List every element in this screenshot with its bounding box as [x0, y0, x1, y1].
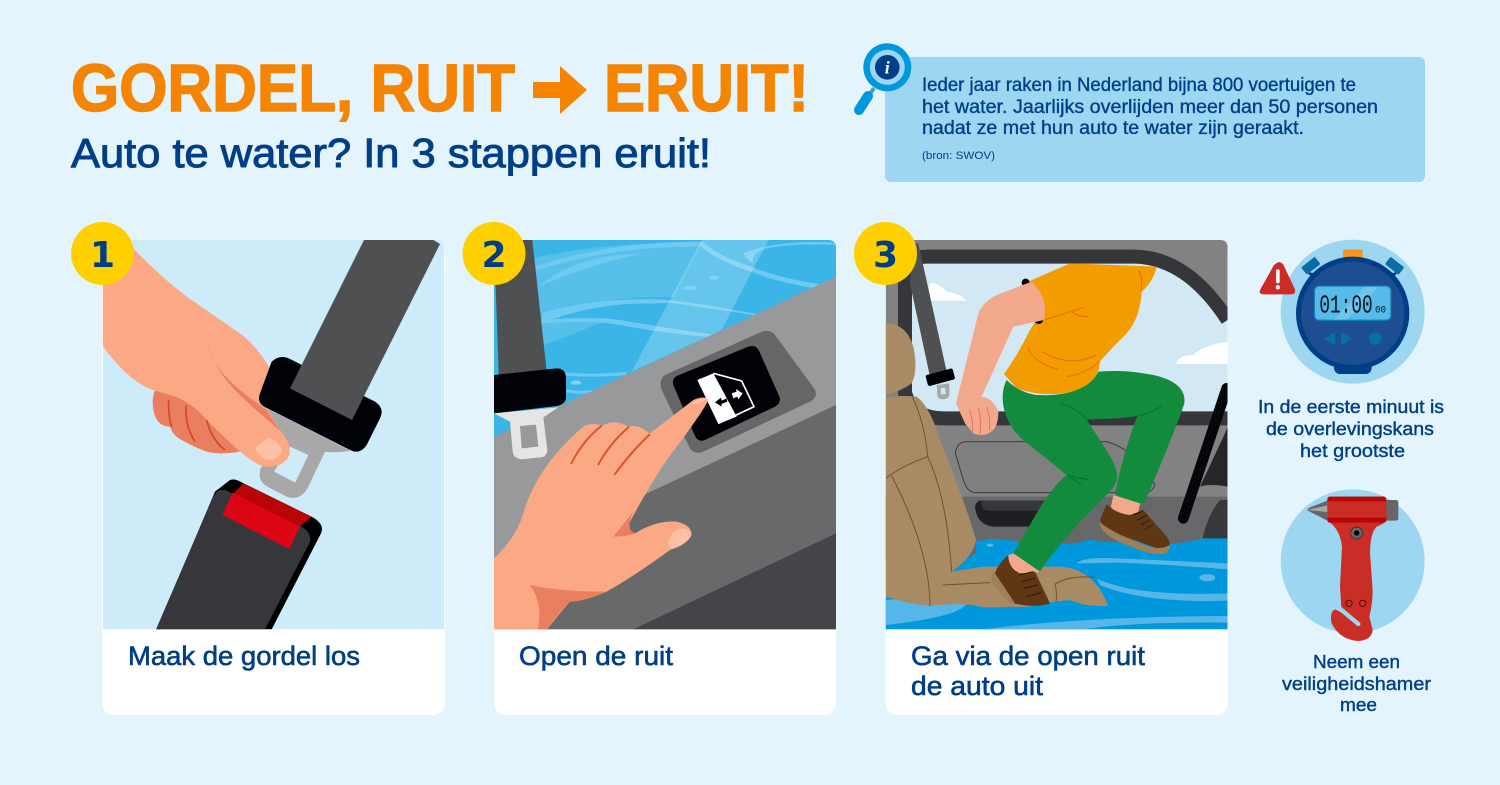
icon: safety hammer — [1281, 489, 1425, 641]
panel: step 2 — [494, 240, 836, 715]
illustration: unbuckling the seat belt — [103, 240, 444, 629]
caption: Open de ruit — [519, 641, 674, 671]
text: survival chance — [1258, 397, 1444, 461]
text: survival chance: het grootste — [1300, 441, 1405, 461]
text: survival chance: In de eerste minuut is — [1258, 397, 1444, 417]
icon: stopwatch with warning — [1260, 240, 1425, 384]
panel: step 1 — [102, 240, 445, 715]
text: bring a safety hammer: mee — [1340, 695, 1377, 715]
caption — [911, 641, 1145, 701]
icon: magnifying glass with info: i — [885, 58, 890, 78]
caption: de auto uit — [911, 671, 1044, 701]
title: GORDEL, RUIT — [71, 51, 515, 126]
icon: magnifying glass with info — [859, 43, 911, 110]
badge: step 2 — [462, 222, 526, 285]
caption: Ga via de open ruit — [911, 641, 1145, 671]
icon: stopwatch with warning: 00 — [1375, 304, 1386, 315]
panel: info box: (bron: SWOV) — [922, 150, 995, 162]
caption: Maak de gordel los — [128, 641, 360, 671]
text: bring a safety hammer: veiligheidshamer — [1282, 674, 1431, 694]
text: bring a safety hammer: Neem een — [1313, 652, 1400, 672]
subtitle: Auto te water? In 3 stappen eruit! — [71, 130, 711, 176]
panel: info box: het water. Jaarlijks overlijden meer dan 50 personen — [922, 97, 1378, 118]
badge: step 3 — [854, 222, 917, 285]
panel: step 3 — [886, 240, 1228, 715]
title: ERUIT! — [604, 51, 809, 126]
text: survival chance: de overlevingskans — [1266, 419, 1434, 439]
badge: step 2: 2 — [481, 235, 507, 276]
illustration: pressing window switch — [494, 240, 836, 629]
icon: stopwatch with warning: 01:00 — [1319, 290, 1373, 320]
panel: info box: nadat ze met hun auto te water zijn geraakt. — [922, 118, 1304, 139]
title — [71, 51, 809, 126]
badge: step 1: 1 — [90, 235, 115, 276]
badge: step 3: 3 — [873, 235, 898, 276]
text: bring a safety hammer — [1282, 652, 1431, 715]
panel: info box: Ieder jaar raken in Nederland bijna 800 voertuigen te — [922, 75, 1356, 96]
illustration: climbing out of the car window — [886, 240, 1228, 629]
panel: info box — [885, 57, 1425, 182]
badge: step 1 — [71, 222, 134, 285]
